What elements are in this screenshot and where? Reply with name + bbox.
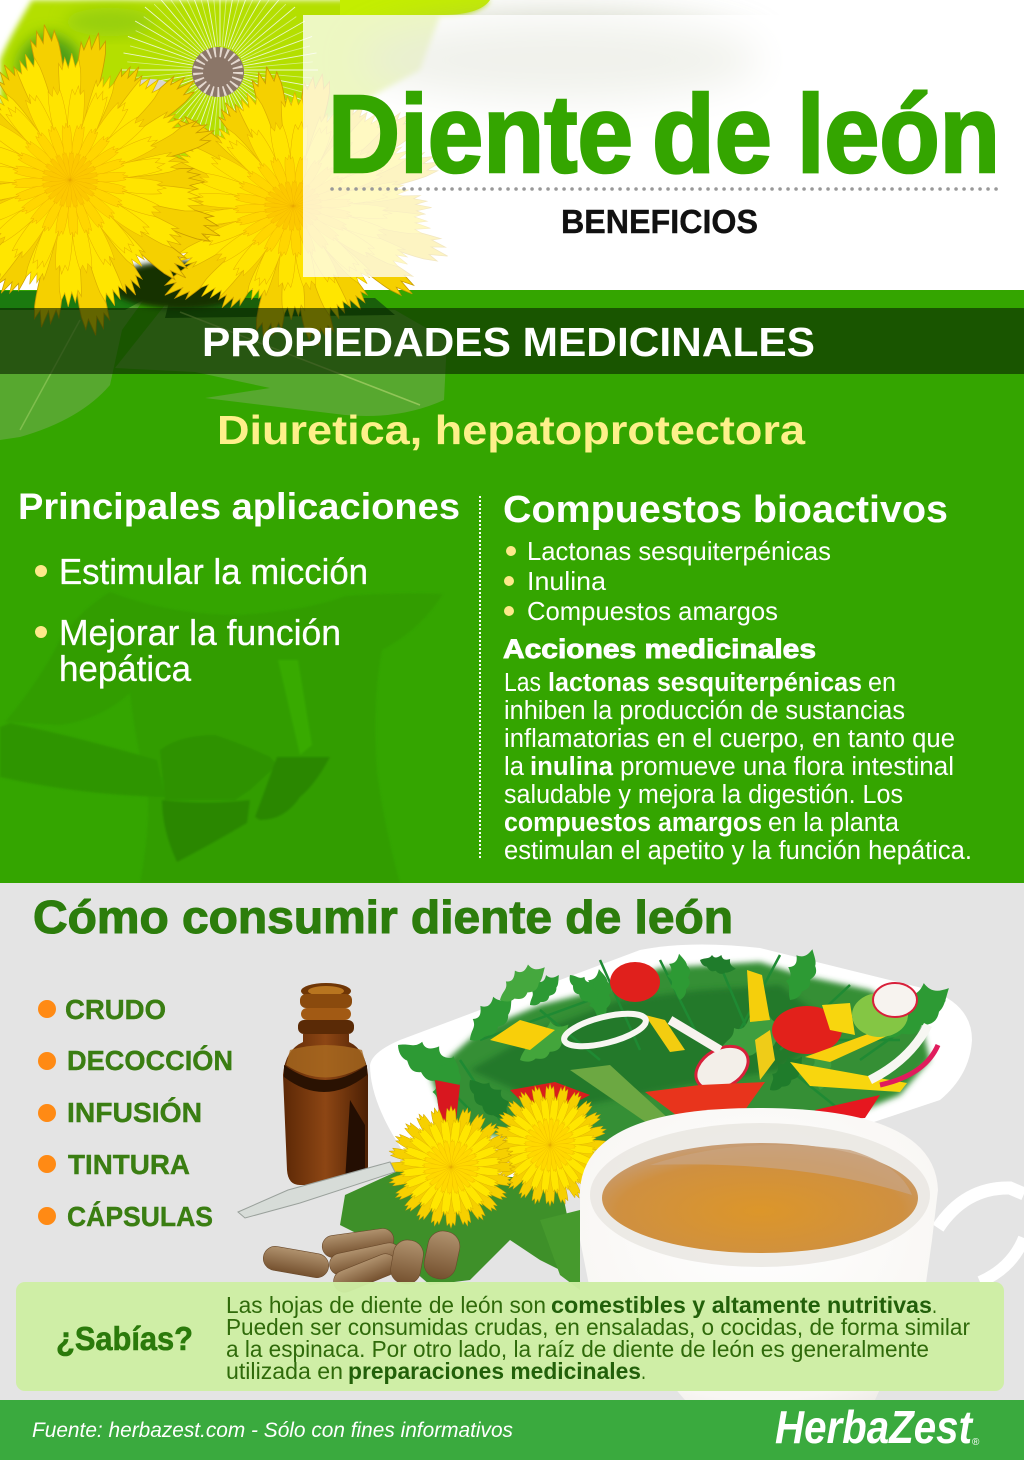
callout: sabias: utilizada en [226, 1358, 343, 1384]
callout: sabias: preparaciones medicinales [348, 1358, 641, 1384]
callout: sabias [16, 1282, 1004, 1391]
illustration: woman with liver [0, 592, 443, 883]
list: forms of consumption: CRUDO [65, 994, 166, 1025]
panel: acciones medicinales: compuestos amargos [504, 809, 762, 837]
list: forms of consumption [38, 994, 233, 1232]
panel: acciones medicinales: en [868, 669, 896, 697]
illustration: capsules [261, 1227, 463, 1296]
panel: acciones medicinales: lactonas sesquiterpénicas [548, 669, 862, 697]
callout: sabias: Pueden ser consumidas crudas, en ensaladas, o cocidas, de forma similar [226, 1314, 970, 1340]
panel: principales aplicaciones [18, 486, 460, 689]
title [328, 73, 1000, 196]
title: león [797, 73, 1000, 196]
heading: como consumir: Cómo consumir diente de león [33, 891, 733, 943]
title: de [652, 73, 772, 196]
callout: sabias: ¿Sabías? [56, 1320, 193, 1357]
list: forms of consumption: INFUSIÓN [67, 1097, 202, 1128]
icon: dandelion seed head [80, 0, 325, 208]
subtitle: BENEFICIOS [561, 203, 758, 240]
panel: acciones medicinales: promueve una flora intestinal [620, 753, 954, 781]
header photo: blurred foliage [0, 0, 760, 250]
subheading: properties: Diuretica, hepatoprotectora [217, 407, 806, 453]
panel: compuestos bioactivos: Inulina [527, 566, 607, 596]
section background: gray [0, 883, 1024, 1400]
title: Diente [328, 73, 633, 196]
panel: acciones medicinales: inhiben la producción de sustancias [504, 697, 905, 725]
panel: acciones medicinales: saludable y mejora la digestión. Los [504, 781, 903, 809]
illustration: salad plate [370, 943, 972, 1180]
panel: acciones medicinales: inflamatorias en el cuerpo, en tanto que [504, 725, 955, 753]
illustration: glass dropper [238, 1162, 395, 1218]
heading band: propiedades medicinales: PROPIEDADES MEDICINALES [202, 319, 815, 365]
panel: compuestos bioactivos: Compuestos amargos [527, 596, 778, 626]
callout: sabias: . [932, 1292, 937, 1318]
illustration: leaves and small flowers [340, 1082, 610, 1290]
callout: sabias: . [641, 1358, 646, 1384]
footer: ® [972, 1437, 980, 1448]
footer: HerbaZest [775, 1401, 973, 1453]
icon: dandelion flowers [0, 0, 516, 386]
list: forms of consumption: TINTURA [68, 1149, 190, 1180]
footer [0, 1400, 1024, 1460]
panel: acciones medicinales: la [504, 753, 525, 781]
panel: compuestos bioactivos [503, 489, 948, 626]
panel: principales aplicaciones: Mejorar la función [59, 612, 341, 653]
panel: principales aplicaciones: Estimular la micción [59, 551, 368, 592]
callout: sabias: a la espinaca. Por otro lado, la raíz de diente de león es generalmente [226, 1336, 929, 1362]
panel: acciones medicinales [503, 634, 972, 865]
panel: acciones medicinales: inulina [530, 753, 614, 781]
callout: sabias: comestibles y altamente nutritivas [551, 1292, 932, 1318]
panel: acciones medicinales: Las [504, 669, 541, 697]
translucent title panel [303, 15, 1024, 277]
list: forms of consumption: DECOCCIÓN [67, 1045, 233, 1076]
panel: principales aplicaciones: hepática [59, 648, 192, 689]
callout: sabias: Las hojas de diente de león son [226, 1292, 546, 1318]
panel: acciones medicinales: estimulan el apetito y la función hepática. [504, 837, 972, 865]
list: forms of consumption: CÁPSULAS [67, 1201, 213, 1232]
heading band: propiedades medicinales [0, 308, 1024, 374]
illustration: tincture bottle [283, 983, 368, 1185]
section background: green [0, 290, 1024, 883]
panel: compuestos bioactivos: Compuestos bioactivos [503, 489, 948, 531]
panel: compuestos bioactivos: Lactonas sesquiterpénicas [527, 536, 831, 566]
panel: principales aplicaciones: Principales aplicaciones [18, 486, 460, 527]
panel: acciones medicinales: en la planta [768, 809, 900, 837]
footer: Fuente: herbazest.com - Sólo con fines informativos [32, 1419, 513, 1442]
panel: acciones medicinales: Acciones medicinales [503, 634, 816, 664]
icon: leaves under flowers [0, 291, 447, 440]
illustration: cup of tea [580, 1108, 1024, 1400]
dotted title rule [332, 187, 999, 191]
